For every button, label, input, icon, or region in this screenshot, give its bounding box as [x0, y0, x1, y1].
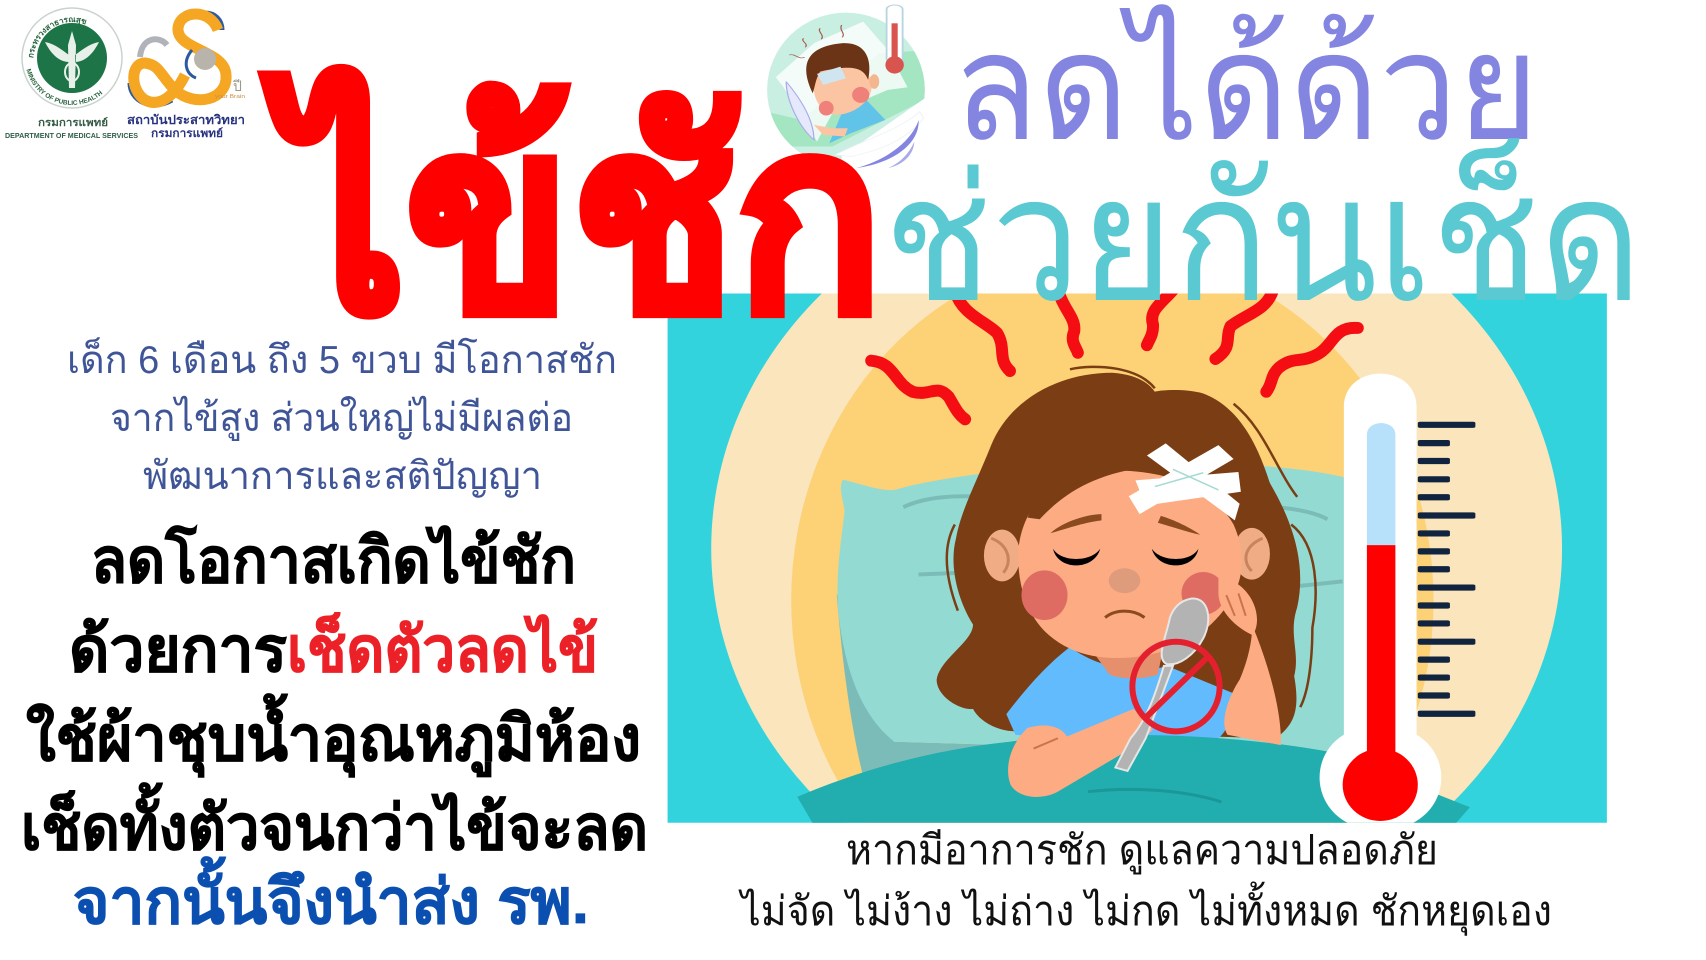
caption: seizure safety: หากมีอาการชัก ดูแลความปลอดภัย: [846, 827, 1438, 875]
logo: ministry of public health: [5, 7, 138, 140]
nose and mouth: [1109, 568, 1140, 593]
arms and hands: [1008, 574, 1281, 797]
eyebrows: [1051, 514, 1200, 535]
logo: institute of neurology 65 years: your Brain: [215, 94, 245, 100]
intro paragraph: เด็ก 6 เดือน ถึง 5 ขวบ มีโอกาสชัก: [67, 336, 617, 382]
logo: ministry of public health: MINISTRY OF PUBLIC HEALTH: [26, 68, 102, 105]
panel: feverish girl illustration: [668, 294, 1607, 823]
subheading: ช่วยกันเช็ด: ช่วยกันเช็ด: [884, 138, 1642, 338]
logo: ministry of public health: กระทรวงสาธารณสุข: [28, 17, 86, 58]
intro paragraph: [67, 336, 617, 498]
bandage: [1129, 443, 1241, 520]
intro paragraph: พัฒนาการและสติปัญญา: [143, 455, 542, 498]
bold advice block: [21, 524, 648, 937]
prohibition sign: [1132, 642, 1220, 731]
logo: ministry of public health: DEPARTMENT OF MEDICAL SERVICES: [5, 131, 138, 140]
eyes: [1053, 549, 1198, 565]
spoon: [1115, 599, 1208, 771]
bold advice block: เช็ดทั้งตัวจนกว่าไข้จะลด: [21, 782, 648, 863]
fever waves: [871, 290, 1358, 419]
bold advice block: จากนั้นจึงนำส่ง รพ.: [73, 856, 589, 937]
icon: sick boy with thermometer: [767, 4, 925, 168]
shirt: [1006, 647, 1234, 738]
pillow: [837, 464, 1373, 780]
logo: institute of neurology 65 years: กรมการแพทย์: [151, 127, 223, 140]
logo: ministry of public health: กรมการแพทย์: [38, 117, 108, 129]
logo: institute of neurology 65 years: ปี: [233, 78, 242, 94]
subheading: ลดได้ด้วย: ลดได้ด้วย: [953, 3, 1539, 171]
cheeks: [1021, 570, 1068, 620]
blanket: [797, 735, 1470, 828]
bold advice block: ลดโอกาสเกิดไข้ชัก: [91, 524, 576, 596]
caption: seizure safety: ไม่จัด ไม่ง้าง ไม่ถ่าง ไม่กด ไม่ทั้งหมด ชักหยุดเอง: [738, 881, 1552, 936]
bold advice block: เช็ดตัวลดไข้: [287, 612, 598, 685]
caption: seizure safety: [738, 827, 1552, 936]
bold advice block: ด้วยการ: [69, 616, 287, 685]
hair: [937, 373, 1300, 738]
face: [1018, 471, 1242, 658]
title: ไข้ชัก: ไข้ชัก: [260, 66, 883, 367]
intro paragraph: จากไข้สูง ส่วนใหญ่ไม่มีผลต่อ: [110, 396, 573, 441]
logo: institute of neurology 65 years: [127, 13, 245, 140]
neck: [1096, 652, 1161, 678]
logo: institute of neurology 65 years: สถาบันประสาทวิทยา: [127, 113, 245, 127]
bold advice block: ใช้ผ้าชุบน้ำอุณหภูมิห้อง: [26, 693, 641, 777]
ears: [984, 530, 1020, 581]
thermometer: [1320, 374, 1475, 831]
